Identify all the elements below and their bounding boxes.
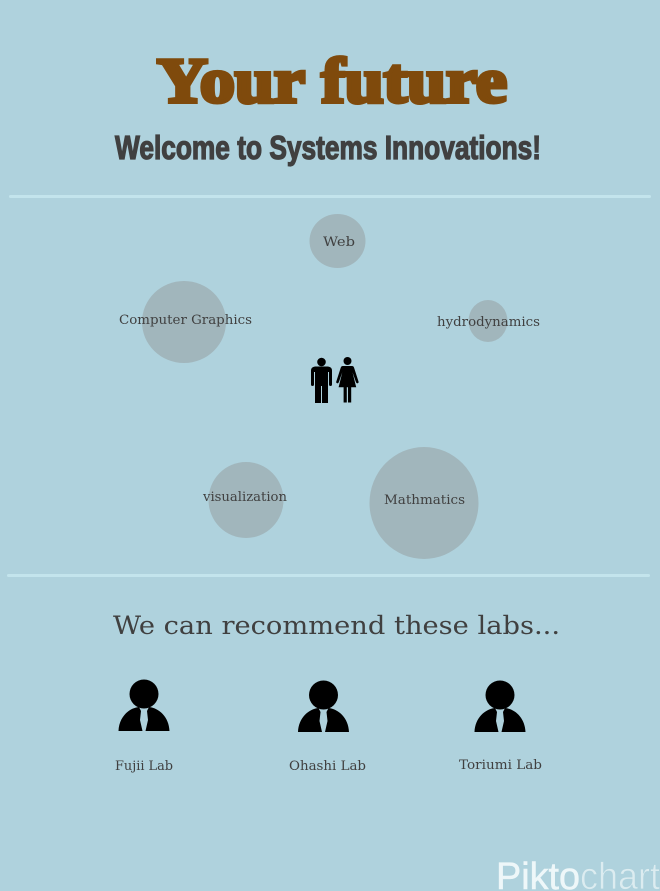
bubble: Computer Graphics [119, 281, 252, 363]
lab: Fujii Lab: Fujii Lab [115, 759, 173, 774]
watermark: Piktochart [496, 856, 660, 891]
icon: person [298, 680, 349, 732]
lab: Fujii Lab [115, 680, 173, 774]
bubble: Web [310, 214, 366, 268]
lab: Toriumi Lab [459, 680, 542, 773]
bubble: Mathmatics: Mathmatics [384, 493, 465, 508]
subtitle: Welcome to Systems Innovations! [115, 129, 541, 166]
bubble: Mathmatics [370, 447, 478, 559]
icon: man and woman [311, 357, 359, 403]
icon: person [118, 680, 170, 731]
bubble: visualization [202, 462, 288, 538]
lab: Toriumi Lab: Toriumi Lab [459, 758, 542, 773]
bubble: hydrodynamics: hydrodynamics [437, 315, 540, 330]
heading: recommended labs: We can recommend these labs... [113, 611, 560, 640]
bubble: Web: Web [323, 235, 355, 250]
bubble: visualization: visualization [202, 490, 288, 505]
icon: person [474, 680, 526, 732]
title: Your future [157, 46, 507, 116]
bubble: Computer Graphics: Computer Graphics [119, 313, 252, 328]
bubble: hydrodynamics [437, 300, 540, 342]
lab: Ohashi Lab: Ohashi Lab [289, 759, 366, 774]
lab: Ohashi Lab [289, 680, 366, 774]
